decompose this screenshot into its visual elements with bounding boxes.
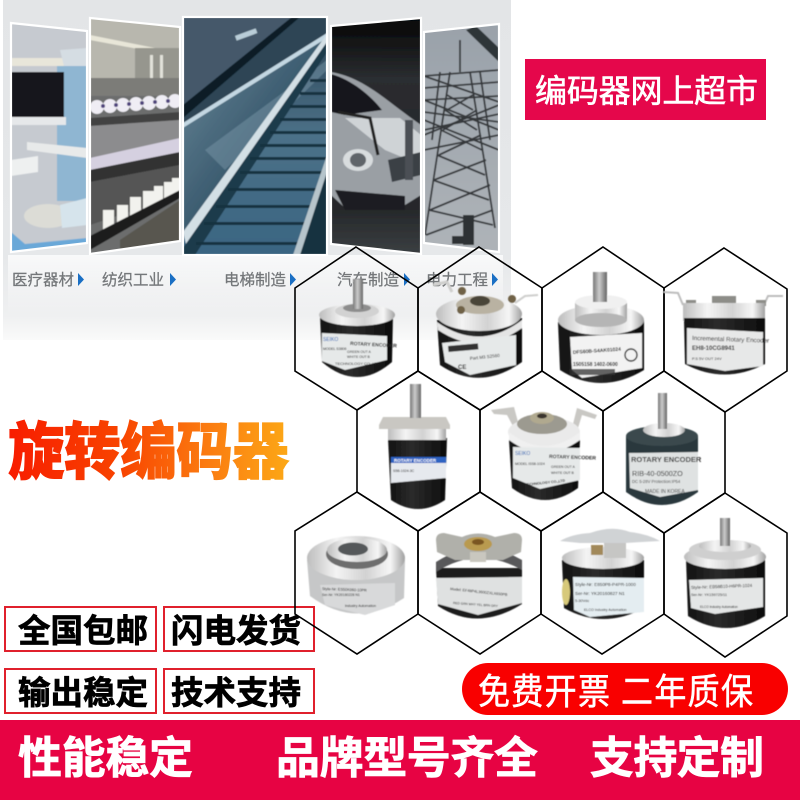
- encoder 9: [436, 533, 522, 619]
- band text: stable performance: 性能稳定: [18, 722, 193, 786]
- encoder 3: [558, 272, 644, 383]
- encoder 3: 1505158 1402-0600: [573, 362, 618, 368]
- photo: medical equipment: [11, 20, 87, 255]
- photo: automobile manufacturing: [331, 18, 421, 256]
- store name badge: [525, 59, 766, 120]
- store name badge: 编码器网上超市: [535, 66, 758, 112]
- encoder 11: Style-Nr: EB58B10-H6PR-1024: [691, 583, 753, 590]
- encoder 1: GREEN OUT A: [347, 350, 372, 354]
- caption: power engineering: 电力工程: [426, 268, 488, 290]
- encoder 6: GREEN OUT A: [551, 465, 576, 469]
- band text: customization supported: 支持定制: [590, 722, 764, 786]
- invoice and warranty pill: 免费开票: [478, 663, 610, 715]
- encoder 5: [379, 384, 450, 509]
- encoder 1: TECHNOLOGY CO.,LTD: [335, 361, 380, 366]
- encoder 11: [684, 518, 766, 628]
- photo: elevator and escalator: [183, 17, 327, 255]
- encoder 4: [663, 292, 783, 374]
- encoder 8: Ser-Nr: YK20160228 N1: [322, 593, 360, 597]
- encoder 8: Style-Nr: ES50K060-10PR: [322, 587, 367, 593]
- panel: industry application banner: [3, 0, 511, 340]
- encoder 6: SEIKO: [515, 451, 530, 457]
- encoder 9: RED GRN WHT YEL BRN GRY: [453, 601, 499, 608]
- encoder 11: Ser-Nr: YK159725/11: [691, 593, 727, 597]
- encoder 1: SEIKO: [323, 337, 338, 343]
- encoder 6: MODEL ISS8-1024: [515, 462, 545, 466]
- encoder 10: Style-Nr: E850P8-P4PR-1000: [575, 582, 636, 587]
- encoder 7: DC 5-28V Protection:IP54: [632, 479, 681, 484]
- encoder 4: P.S 5V OUT 24V: [692, 356, 722, 361]
- caption: medical equipment: 医疗器材: [12, 268, 74, 290]
- reflections under photos: [8, 255, 503, 315]
- photo: electric power engineering: [424, 24, 499, 254]
- photo frames: [11, 17, 499, 255]
- encoder 9: Model: EF48P4L3600ZXLX650PB: [450, 587, 508, 597]
- caption: elevator manufacturing: 电梯制造: [224, 268, 287, 290]
- encoder 10: ELCO Industry Automation: [584, 608, 627, 612]
- encoder 7: [626, 393, 702, 505]
- encoder 8: [307, 536, 405, 615]
- encoder 2: CE: [458, 365, 466, 371]
- encoder 4: Incremental Rotary Encoder: [692, 335, 769, 345]
- encoder 3: DFS60B-S4AK01024: [573, 347, 621, 356]
- encoder 1: WHITE OUT B: [347, 355, 371, 359]
- bottom band: [0, 720, 800, 800]
- encoder 10: [560, 529, 660, 619]
- encoder 8: Industry Automation: [345, 604, 376, 608]
- band text: complete brands and models: 品牌型号齐全: [276, 722, 538, 786]
- encoder 2: [433, 282, 538, 378]
- feature tag: technical support: 技术支持: [171, 667, 301, 714]
- caption: textile industry: 纺织工业: [102, 268, 164, 290]
- caption: automobile manufacturing: 汽车制造: [337, 268, 400, 290]
- encoder 7: MADE IN KOREA: [645, 489, 685, 495]
- encoder 11: ELCO Industry Automation: [700, 605, 738, 609]
- photo: textile industry: [90, 15, 182, 255]
- encoder 1: ROTARY ENCODER: [350, 341, 397, 349]
- encoder 2: Part M3 S2560: [470, 353, 500, 361]
- encoder 5: ROTARY ENCODER: [394, 458, 437, 463]
- encoder 6: [491, 407, 597, 500]
- encoder 1: [319, 279, 397, 377]
- invoice and warranty pill: [462, 663, 788, 715]
- encoder 5: S5B-1024-3C: [393, 469, 415, 473]
- encoder 6: ROTARY ENCODER: [549, 454, 596, 462]
- encoder 10: Ser-Nr: YK20160827 N1: [575, 591, 625, 596]
- encoder 1: MODEL S3806: [323, 347, 346, 351]
- feature tag: fast delivery: 闪电发货: [171, 605, 301, 652]
- encoder 6: WHITE OUT B: [551, 471, 575, 475]
- feature tag: free shipping: 全国包邮: [18, 605, 148, 652]
- invoice and warranty pill: 二年质保: [621, 663, 753, 715]
- feature tag: stable output: 输出稳定: [18, 667, 148, 714]
- encoder 7: RIB-40-0500ZO: [632, 469, 683, 478]
- encoder 7: ROTARY ENCODER: [631, 455, 702, 464]
- encoder 10: 5-30Vdc: [575, 599, 589, 603]
- banner background: [3, 0, 511, 340]
- hexagon grid: [295, 247, 787, 657]
- encoder 6: TECHNOLOGY CO.,LTD: [525, 479, 566, 487]
- title: 旋转编码器: [8, 402, 290, 492]
- encoder 4: EH8-10CG8941: [692, 346, 735, 352]
